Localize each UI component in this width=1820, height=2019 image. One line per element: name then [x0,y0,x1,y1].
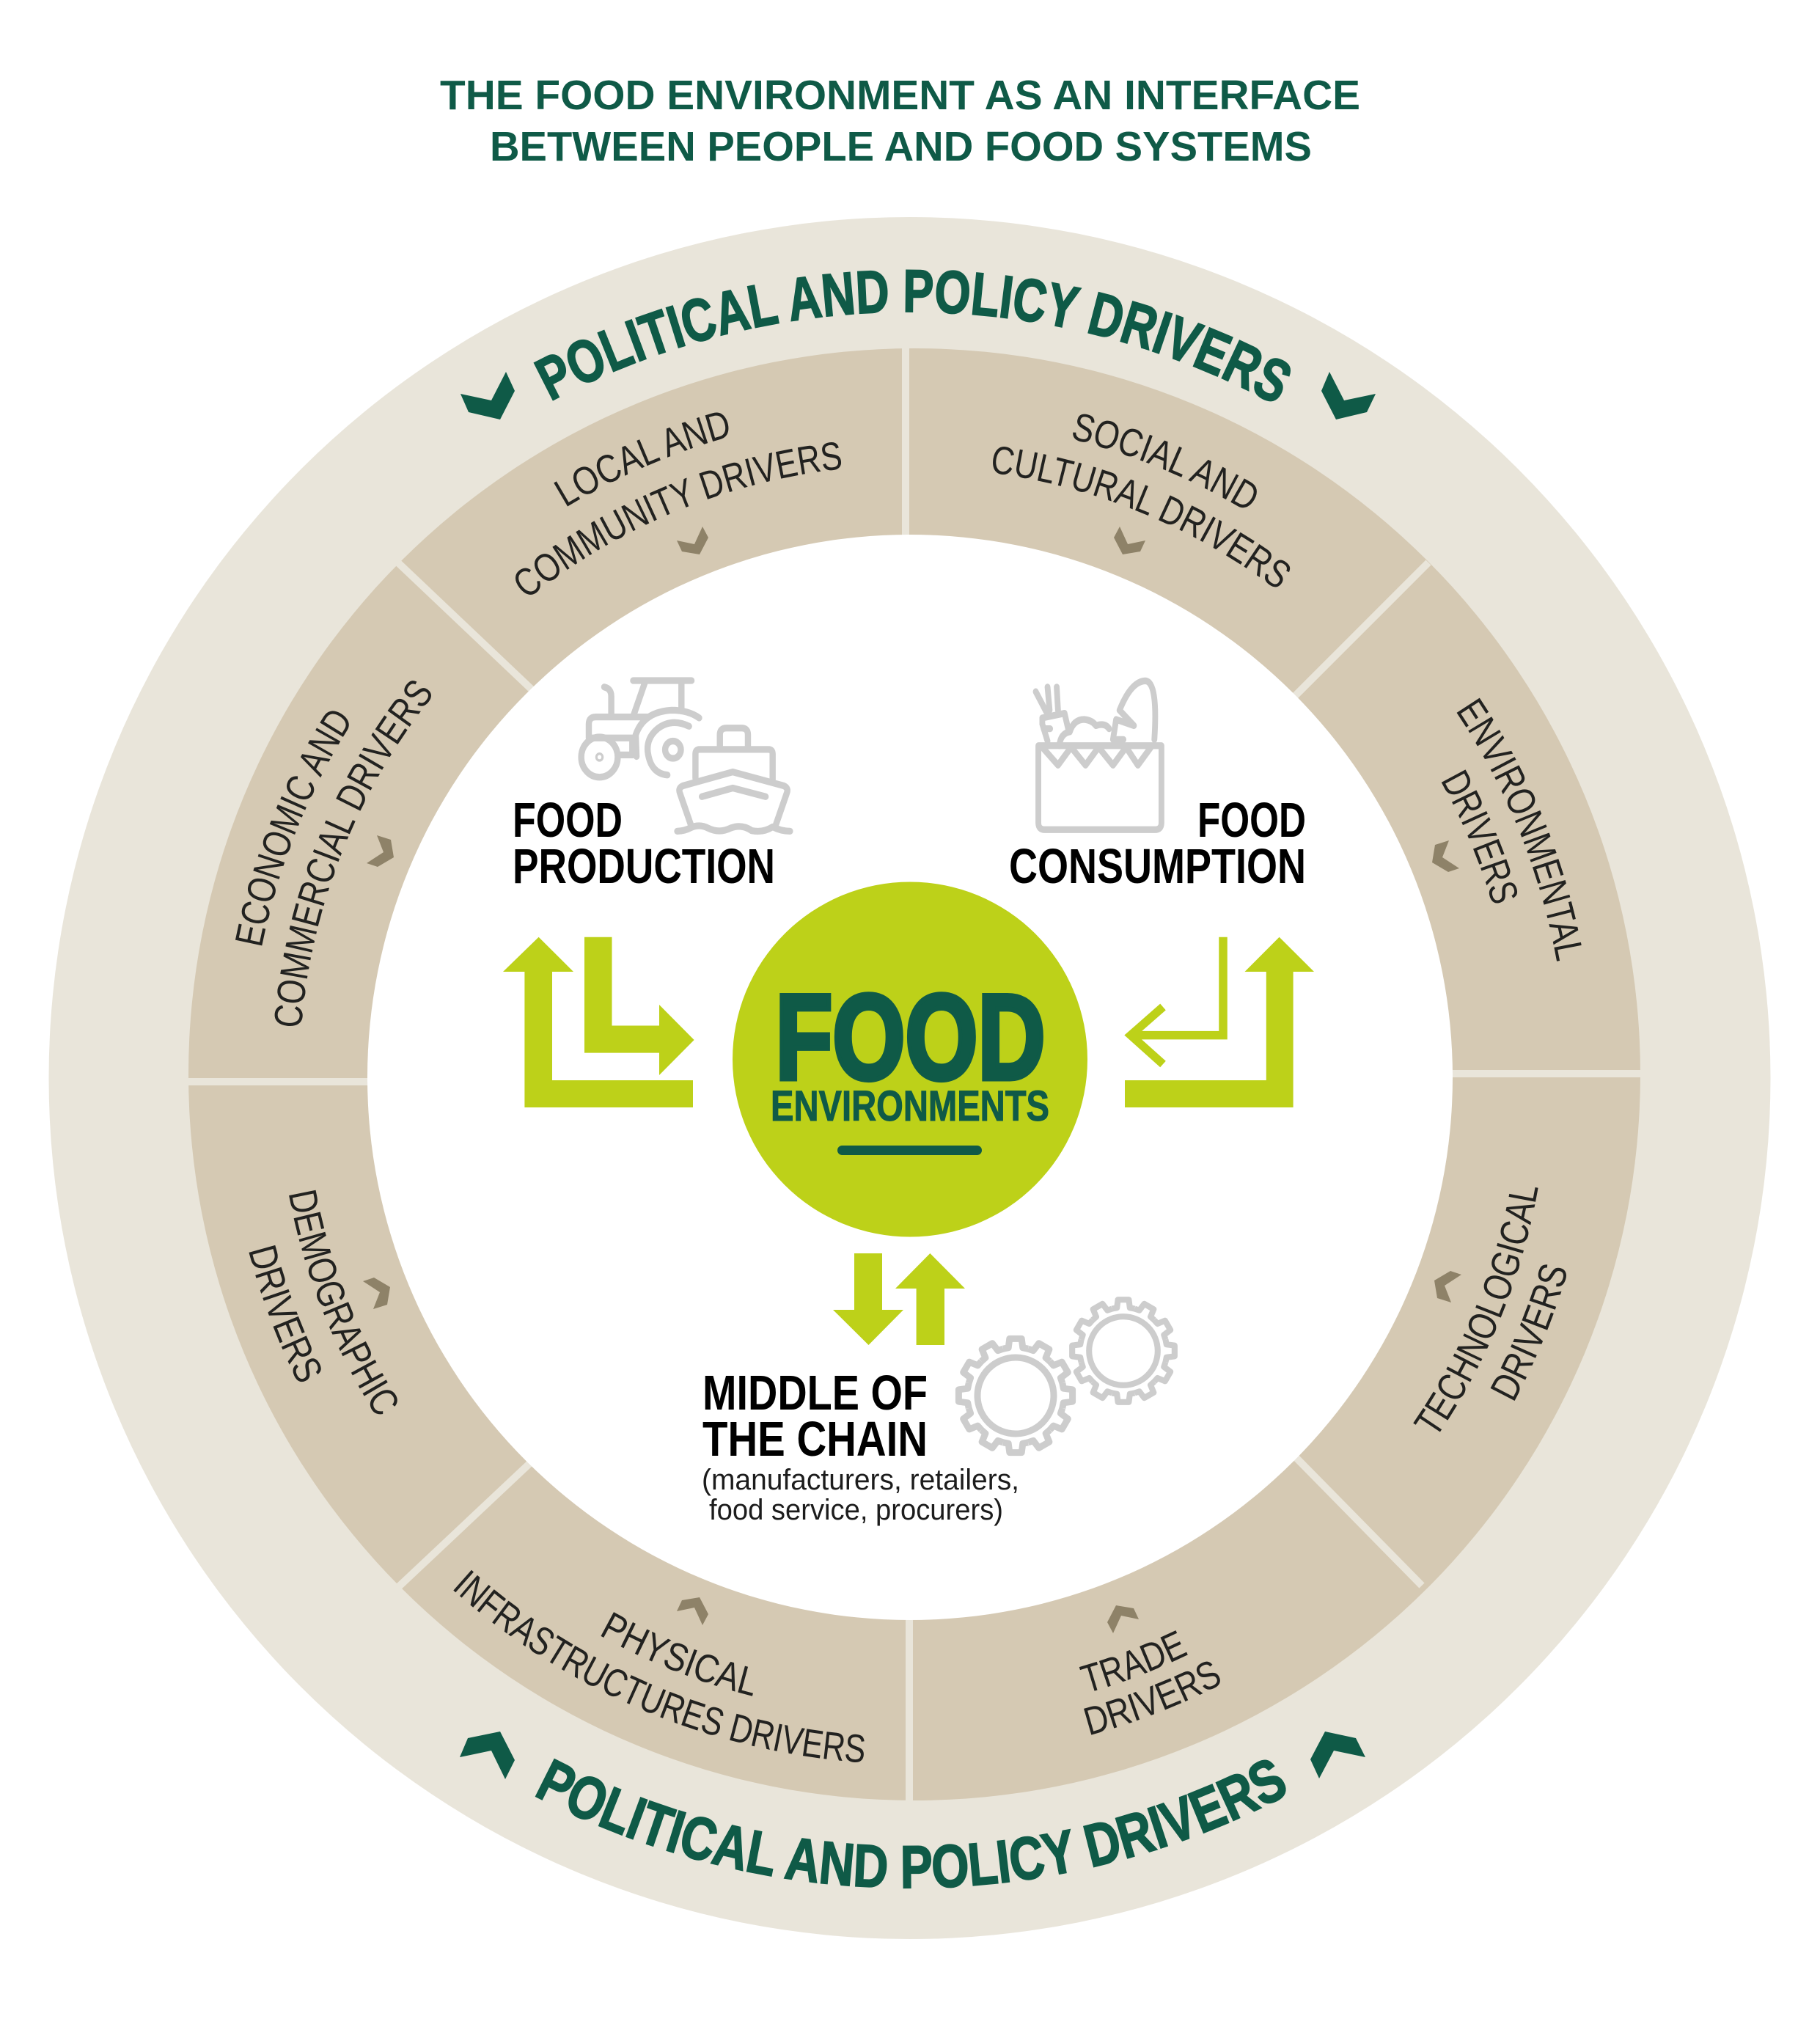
label: local and community drivers: COMMUNITY DRIVERS [515,442,842,595]
label: trade drivers [1079,1605,1220,1735]
label: local and community drivers: LOCAL AND [554,412,729,506]
label: trade drivers: DRIVERS [1084,1662,1220,1735]
arrow: up from middle of the chain [895,1253,965,1345]
icon: chevron bottom right [1310,1732,1365,1778]
label: technological drivers: DRIVERS [1490,1264,1566,1401]
drivers ring [183,341,1646,1808]
arrow: food consumption up [1125,937,1314,1107]
central circle: food environments [733,882,1087,1236]
icon: tractor and ship [581,681,790,832]
label: economic and commercial drivers: COMMERCIAL DRIVERS [274,681,431,1026]
icon: chevron top right [1321,372,1376,419]
label: physical infrastructures drivers: PHYSICAL [601,1612,753,1696]
arrow: food production up [503,937,693,1107]
arrow: food production to centre [584,937,694,1075]
label: social and cultural drivers: SOCIAL AND [1073,414,1257,508]
label: environmental drivers: DRIVERS [1442,769,1518,904]
icon: grocery bag [1035,681,1162,829]
heading: food consumption: CONSUMPTION [1009,839,1306,894]
heading: political and policy drivers (top): POLITICAL AND POLICY DRIVERS [534,270,1291,402]
icon: chevron top left [460,372,515,419]
heading: food production: FOOD [513,793,623,848]
heading: food consumption: FOOD [1197,793,1306,848]
label: trade drivers: TRADE [1079,1630,1188,1691]
heading: food consumption [1009,793,1306,894]
label: social and cultural drivers: CULTURAL DRIVERS [993,447,1291,587]
heading: middle of the chain [702,1366,928,1467]
heading: middle of the chain: THE CHAIN [702,1412,928,1467]
title: THE FOOD ENVIRONMENT AS AN INTERFACE [440,72,1360,119]
title [440,72,1360,170]
label: technological drivers: TECHNOLOGICAL [1413,1187,1538,1432]
label: economic and commercial drivers: ECONOMIC AND [235,711,349,946]
icon: gears [958,1300,1175,1453]
arrow: down to middle of the chain [833,1253,903,1345]
text: middle of the chain description: (manufacturers, retailers, [702,1464,1019,1496]
heading: food production: PRODUCTION [513,839,775,894]
heading: political and policy drivers (bottom): POLITICAL AND POLICY DRIVERS [535,1759,1286,1889]
label: demographic drivers: DEMOGRAPHIC [289,1190,397,1414]
title: BETWEEN PEOPLE AND FOOD SYSTEMS [490,123,1312,170]
central circle: food environments: FOOD [776,970,1046,1104]
label: demographic drivers: DRIVERS [249,1245,321,1382]
text: middle of the chain description [702,1464,1019,1526]
central circle: food environments: ENVIRONMENTS [771,1082,1049,1130]
icon: chevron bottom left [460,1732,515,1779]
label: physical infrastructures drivers: INFRASTRUCTURES DRIVERS [453,1569,865,1762]
label: environmental drivers: ENVIRONMENTAL [1456,698,1582,961]
heading: middle of the chain: MIDDLE OF [702,1366,928,1421]
heading: food production [513,793,775,894]
arrow: centre to food consumption [1131,937,1223,1064]
label: demographic drivers [249,1190,397,1414]
text: middle of the chain description: food service, procurers) [709,1494,1003,1526]
